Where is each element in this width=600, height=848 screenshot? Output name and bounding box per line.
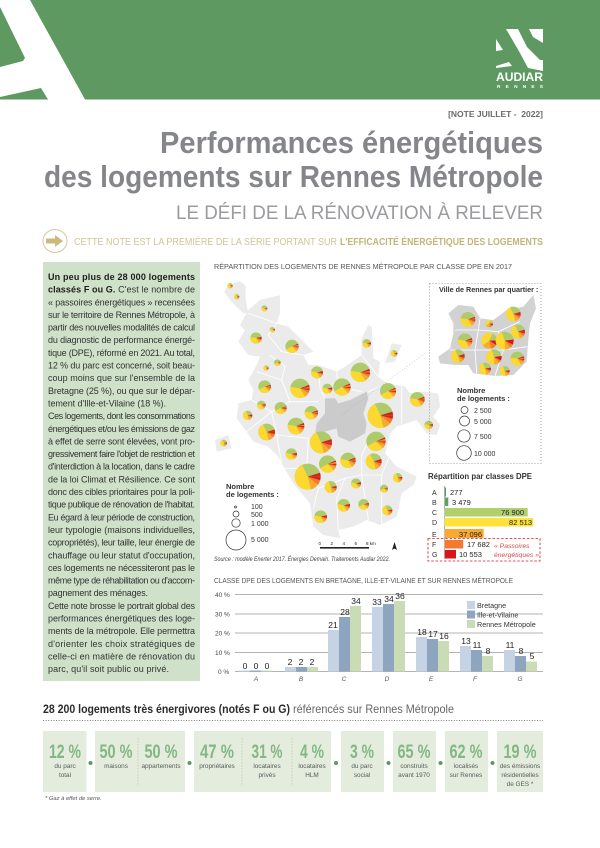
- bar chart: classes DPE by territory: 0: [243, 661, 248, 671]
- panel: key figure boxes: 4 %: [300, 742, 324, 763]
- chart: répartition par classes DPE: 17 682: [467, 540, 490, 549]
- chart: répartition par classes DPE: Répartition par classes DPE: [428, 472, 532, 481]
- chart: répartition par classes DPE: 37 096: [459, 530, 482, 539]
- panel: intro text: parc, qu'il soit public ou privé.: [48, 664, 169, 674]
- logo: Audiar Rennes: [496, 29, 544, 90]
- panel: key figure boxes: avant 1970: [398, 772, 430, 779]
- chart: répartition par classes DPE: B: [432, 500, 437, 507]
- panel: intro text: coup moins que sur l'ensemble de la: [48, 373, 195, 383]
- panel: inset Ville de Rennes par quartier: 7 500: [474, 434, 492, 441]
- panel: intro text: performances énergétiques des loge-: [48, 614, 195, 624]
- chart: répartition par classes DPE: 82 513: [509, 518, 532, 527]
- panel: key figure boxes: construits: [400, 763, 428, 770]
- legend: map number of dwellings: 1 000: [251, 521, 269, 528]
- panel: key figure boxes: sur Rennes: [450, 772, 482, 779]
- bar chart: classes DPE by territory: 34: [351, 596, 361, 606]
- bar chart: classes DPE by territory: 13: [461, 636, 471, 646]
- legend: map number of dwellings: 100: [251, 504, 263, 511]
- legend: map number of dwellings: de logements :: [226, 490, 279, 499]
- panel: intro text: de la loi Climat et Résilience. Ce sont: [48, 474, 195, 484]
- panel: intro text: tique publique de rénovation de l'habitat.: [48, 500, 195, 510]
- panel: intro text: classés F ou G. C'est le nombre de: [48, 285, 195, 295]
- header banner: [0, 0, 600, 100]
- panel: key figure boxes: 31 %: [252, 742, 283, 763]
- chart heading: CLASSE DPE DES LOGEMENTS EN BRETAGNE, ILLE-ET-VILAINE ET SUR RENNES MÉTROPOLE: [214, 576, 513, 585]
- bar chart: classes DPE by territory: 11: [473, 640, 482, 650]
- panel: key figure boxes: propriétaires: [199, 763, 235, 770]
- panel: key figure boxes: localisés: [454, 763, 478, 770]
- bar chart: classes DPE by territory: 16: [439, 631, 449, 641]
- bar chart: classes DPE by territory: 2: [310, 657, 315, 667]
- bar chart: classes DPE by territory: 40 %: [215, 592, 230, 599]
- bar chart: classes DPE by territory: 0 %: [218, 669, 229, 676]
- panel: key figure boxes: 19 %: [504, 742, 537, 763]
- bar chart: classes DPE by territory: 20 %: [215, 630, 230, 638]
- bar chart: classes DPE by territory: 0: [254, 661, 259, 671]
- logo: Audiar Rennes: RENNES: [497, 84, 544, 90]
- legend: map number of dwellings: [226, 482, 279, 550]
- tagline: CETTE NOTE EST LA PREMIÈRE DE LA SÉRIE PORTANT SUR: [74, 235, 337, 248]
- title: Performances énergétiques: [160, 125, 543, 160]
- bar chart: classes DPE by territory: 18: [417, 627, 427, 637]
- panel: intro text: même type de réhabilitation ou d'accom-: [48, 576, 195, 586]
- panel: intro text: du diagnostic de performance énergé-: [48, 335, 195, 345]
- chart: répartition par classes DPE: 76 900: [501, 508, 524, 517]
- bar chart: classes DPE by territory: 5: [530, 651, 535, 661]
- bar chart: classes DPE by territory: 30 %: [215, 612, 230, 618]
- chart: répartition par classes DPE: D: [432, 520, 437, 527]
- section heading: key figures: référencés sur Rennes Métropole: [293, 702, 454, 716]
- chart legend: [467, 601, 536, 629]
- panel: key figure boxes: appartements: [141, 763, 181, 770]
- panel: intro text: ces logements ne nécessiteront pas le: [48, 563, 195, 573]
- panel: key figure boxes: total: [59, 772, 71, 779]
- bar chart: classes DPE by territory: 28: [340, 607, 350, 617]
- panel: intro text: énergétiques et/ou les émissions de gaz: [48, 424, 196, 434]
- scale bar and north arrow: 2: [330, 541, 334, 546]
- bar chart: classes DPE by territory: 0: [265, 661, 270, 671]
- chart: répartition par classes DPE: [428, 472, 540, 561]
- scale bar and north arrow: 6: [354, 541, 358, 546]
- panel: intro text: chauffage ou leur statut d'occupation,: [48, 550, 195, 560]
- panel: key figure boxes: 3 %: [350, 742, 374, 763]
- map heading: RÉPARTITION DES LOGEMENTS DE RENNES MÉTROPOLE PAR CLASSE DPE EN 2017: [214, 262, 512, 271]
- section heading: key figures: 28 200 logements très énergivores (notés F ou G): [43, 702, 290, 716]
- panel: intro text: [43, 262, 200, 681]
- commune pies: [222, 284, 431, 520]
- panel: key figure boxes: 62 %: [450, 742, 483, 763]
- bar chart: classes DPE by territory: A: [253, 676, 258, 683]
- panel: inset Ville de Rennes par quartier: [430, 284, 541, 464]
- panel: intro text: 12 % du parc est concerné, soit beau-: [48, 360, 195, 370]
- panel: intro text: gressivement faire l'objet de restriction et: [48, 449, 195, 459]
- panel: intro text: ments de la métropole. Elle permettra: [48, 626, 195, 636]
- bar chart: classes DPE by territory: 8: [519, 646, 524, 656]
- panel: inset Ville de Rennes par quartier: Nombre: [457, 386, 485, 395]
- subtitle: LE DÉFI DE LA RÉNOVATION À RELEVER: [176, 203, 543, 224]
- bar chart: classes DPE by territory: 11: [506, 640, 515, 650]
- panel: key figure boxes: maisons: [104, 763, 128, 770]
- panel: inset Ville de Rennes par quartier: 2 500: [474, 408, 492, 415]
- panel: intro text: donc des cibles prioritaires pour la poli-: [48, 487, 195, 497]
- panel: intro text: copropriétés), leur taille, leur énergie de: [48, 538, 195, 548]
- legend: map number of dwellings: Nombre: [226, 482, 254, 491]
- map source: Source : modèle Enerter 2017. Énergies Demain. Traitements Audiar 2022.: [214, 554, 390, 563]
- panel: intro text: Eu égard à leur période de construction,: [48, 512, 195, 522]
- panel: key figure boxes: de GES *: [507, 781, 534, 788]
- panel: intro text: sur le territoire de Rennes Métropole, à: [48, 310, 195, 320]
- panel: inset Ville de Rennes par quartier: 10 000: [474, 451, 496, 458]
- panel: inset Ville de Rennes par quartier: Ville de Rennes par quartier :: [439, 285, 538, 294]
- bar chart: classes DPE by territory: D: [385, 676, 390, 683]
- section heading: key figures: [43, 702, 454, 716]
- icon: arrow in circle: [43, 230, 67, 252]
- chart: répartition par classes DPE: A: [432, 490, 437, 497]
- Rennes city: [315, 392, 368, 442]
- title: des logements sur Rennes Métropole: [44, 159, 543, 194]
- panel: intro text: celle-ci en matière de rénovation du: [48, 652, 195, 662]
- callout: passoires énergétiques: énergétiques »: [494, 552, 539, 559]
- panel: key figure boxes: 50 %: [100, 742, 133, 763]
- panel: intro text: « passoires énergétiques » recensées: [48, 297, 196, 307]
- panel: intro text: partir des nouvelles modalités de calcul: [48, 323, 195, 333]
- logo: Audiar Rennes: AUDIAR: [496, 71, 544, 84]
- panel: intro text: Bretagne (25 %), ou que sur le dépar-: [48, 386, 195, 396]
- chart: répartition par classes DPE: G: [432, 552, 437, 559]
- footnote: * Gaz à effet de serre.: [45, 796, 102, 802]
- callout: passoires énergétiques: « Passoires: [494, 543, 530, 550]
- legend: map number of dwellings: 500: [251, 512, 263, 519]
- bar chart: classes DPE by territory: F: [473, 676, 478, 683]
- panel: key figure boxes: social: [354, 772, 370, 779]
- bar chart: classes DPE by territory: C: [342, 676, 347, 683]
- tagline: L'EFFICACITÉ ÉNERGÉTIQUE DES LOGEMENTS: [340, 235, 543, 248]
- scale bar and north arrow: 4: [342, 541, 346, 546]
- panel: intro text: d'interdiction à la location, dans le cadre: [48, 462, 195, 472]
- bar chart: classes DPE by territory: 2: [288, 657, 293, 667]
- panel: inset Ville de Rennes par quartier: 5 000: [474, 419, 492, 426]
- panel: intro text: tement d'Ille-et-Vilaine (18 %).: [48, 398, 166, 408]
- chart legend: Ille-et-Vilaine: [477, 610, 518, 620]
- map: Rennes Métropole communes with pies: [215, 281, 440, 538]
- scale bar and north arrow: 8 km: [366, 541, 376, 546]
- panel: intro text: tique (DPE), réformé en 2021. Au total,: [48, 348, 195, 358]
- chart: répartition par classes DPE: 10 553: [459, 550, 482, 559]
- bar chart: classes DPE by territory: B: [299, 676, 304, 683]
- bar chart: classes DPE by territory: 10 %: [215, 650, 230, 657]
- scale bar and north arrow: [318, 541, 397, 550]
- chart legend: Bretagne: [477, 601, 506, 610]
- bar chart: classes DPE by territory: 21: [328, 620, 338, 630]
- note date: [NOTE JUILLET - 2022]: [448, 109, 543, 119]
- chart: répartition par classes DPE: C: [432, 510, 437, 517]
- bar chart: classes DPE by territory: [215, 591, 543, 683]
- panel: inset Ville de Rennes par quartier: de logements :: [457, 394, 510, 403]
- panel: key figure boxes: du parc: [351, 763, 373, 770]
- panel: key figure boxes: [43, 731, 543, 792]
- bar chart: classes DPE by territory: 36: [395, 591, 405, 601]
- bar chart: classes DPE by territory: E: [429, 676, 434, 683]
- chart: répartition par classes DPE: 3 479: [452, 498, 471, 507]
- panel: key figure boxes: locataires: [298, 763, 326, 770]
- bar chart: classes DPE by territory: 8: [486, 646, 491, 656]
- bar chart: classes DPE by territory: G: [517, 676, 523, 683]
- legend: map number of dwellings: 5 000: [251, 537, 269, 544]
- chart: répartition par classes DPE: E: [432, 532, 437, 539]
- callout: passoires énergétiques: [428, 538, 540, 561]
- title: [44, 125, 543, 194]
- chart: répartition par classes DPE: 277: [450, 488, 463, 497]
- panel: key figure boxes: locataires: [253, 763, 281, 770]
- panel: intro text: Ces logements, dont les consommations: [48, 411, 196, 421]
- panel: intro text: d'orienter les choix stratégiques de: [48, 639, 195, 649]
- panel: key figure boxes: des émissions: [500, 763, 540, 770]
- chart: répartition par classes DPE: F: [432, 542, 436, 549]
- tagline: [74, 235, 543, 248]
- bar chart: classes DPE by territory: 33: [372, 597, 382, 607]
- bar chart: classes DPE by territory: 2: [299, 657, 304, 667]
- panel: key figure boxes: 50 %: [144, 742, 178, 763]
- panel: key figure boxes: du parc: [54, 763, 76, 770]
- panel: key figure boxes: 65 %: [398, 742, 431, 763]
- panel: intro text: leur typologie (maisons individuelles,: [48, 525, 195, 535]
- panel: key figure boxes: HLM: [305, 772, 319, 779]
- scale bar and north arrow: 0: [318, 541, 322, 546]
- panel: intro text: Cette note brosse le portrait global des: [48, 601, 196, 611]
- panel: key figure boxes: privés: [258, 772, 276, 779]
- bar chart: classes DPE by territory: 34: [384, 594, 394, 604]
- chart legend: Rennes Métropole: [477, 620, 536, 629]
- panel: key figure boxes: 47 %: [200, 742, 234, 763]
- panel: intro text: à effet de serre sont élevées, vont pro-: [48, 436, 195, 446]
- panel: intro text: Un peu plus de 28 000 logements: [48, 272, 195, 282]
- panel: key figure boxes: 12 %: [49, 742, 81, 763]
- panel: intro text: pagnement des ménages.: [48, 588, 148, 598]
- bar chart: classes DPE by territory: 17: [428, 629, 438, 639]
- panel: key figure boxes: résidentielles: [501, 772, 539, 779]
